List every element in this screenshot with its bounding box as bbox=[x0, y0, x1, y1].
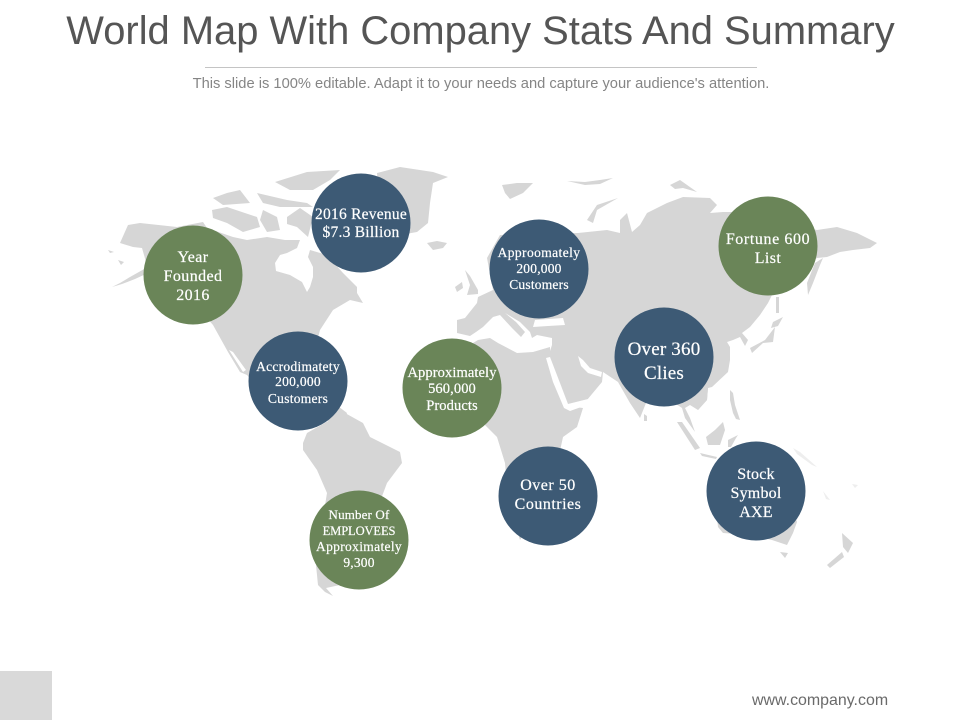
circle: countries: Countries bbox=[515, 496, 581, 513]
North America bbox=[120, 222, 363, 425]
circle: cities: Over 360 bbox=[628, 339, 700, 360]
world map bbox=[108, 167, 877, 596]
circle: customers europe: Approomately bbox=[498, 245, 580, 260]
circle: products: Products bbox=[426, 398, 478, 414]
circle: products: Approximately bbox=[407, 365, 497, 381]
Malaya and Indochina bbox=[698, 388, 708, 410]
circle: revenue: $7.3 Billion bbox=[322, 224, 400, 241]
subtitle: This slide is 100% editable. Adapt it to your needs and capture your audience's attention. bbox=[193, 76, 769, 92]
Novaya Zemlya bbox=[587, 198, 618, 223]
circle: fortune 600 bbox=[718, 196, 818, 296]
circle: stock symbol bbox=[706, 442, 806, 540]
circle: revenue: 2016 Revenue bbox=[315, 206, 407, 223]
Kamchatka bbox=[807, 258, 823, 295]
Iceland bbox=[427, 241, 447, 250]
Red Sea and Gulf of Aden bbox=[546, 357, 588, 411]
website url: www.company.com bbox=[752, 692, 888, 709]
Africa bbox=[445, 338, 583, 540]
Severnaya Zemlya bbox=[670, 180, 697, 192]
Japan bbox=[771, 317, 783, 328]
Greenland bbox=[377, 167, 448, 235]
circle: stock symbol: AXE bbox=[739, 504, 773, 521]
circle: employees: 9,300 bbox=[343, 555, 375, 570]
Europe and Asia bbox=[457, 197, 877, 432]
circle: customers europe bbox=[490, 220, 588, 318]
Java bbox=[700, 453, 717, 459]
circle: stock symbol: Stock bbox=[737, 466, 775, 483]
Tasmania bbox=[780, 552, 788, 558]
corner block bbox=[0, 671, 52, 720]
circle: products bbox=[402, 338, 502, 438]
circle: cities bbox=[614, 308, 714, 406]
circle: year founded bbox=[144, 226, 242, 324]
Sulawesi bbox=[728, 435, 738, 447]
New Zealand bbox=[827, 533, 853, 568]
Canadian Arctic islands bbox=[275, 170, 340, 190]
British Isles bbox=[465, 270, 478, 295]
Gulf of California bbox=[229, 350, 246, 372]
circle: customers americas: 200,000 bbox=[275, 374, 321, 389]
circle: employees: Number Of bbox=[329, 507, 390, 522]
Svalbard bbox=[502, 183, 533, 199]
circle: customers americas bbox=[248, 332, 348, 430]
circle: customers europe: Customers bbox=[509, 277, 569, 292]
Alaska peninsula bbox=[112, 268, 148, 287]
Borneo bbox=[706, 422, 725, 445]
circle: customers americas: Customers bbox=[268, 391, 328, 406]
circle: fortune 600: Fortune 600 bbox=[726, 231, 810, 248]
Sumatra bbox=[677, 422, 700, 450]
circle: stock symbol: Symbol bbox=[730, 485, 782, 502]
circle: countries bbox=[498, 446, 598, 546]
Franz Josef Land bbox=[567, 178, 613, 185]
Sri Lanka bbox=[644, 414, 647, 421]
circle: revenue bbox=[312, 174, 410, 272]
Persian Gulf bbox=[578, 356, 602, 377]
Black Sea bbox=[533, 318, 565, 327]
circle: customers americas: Accrodimatety bbox=[256, 359, 340, 374]
circle: year founded: Founded bbox=[164, 268, 222, 285]
circle: employees: EMPLOVEES bbox=[323, 524, 396, 538]
South America bbox=[303, 413, 402, 596]
circle: employees bbox=[310, 490, 408, 590]
circle: year founded: Year bbox=[177, 249, 209, 266]
faint Pacific islands bbox=[793, 448, 858, 500]
circle: cities: Clies bbox=[644, 363, 684, 384]
title: World Map With Company Stats And Summary bbox=[66, 9, 895, 53]
circle: products: 560,000 bbox=[428, 381, 476, 397]
circle: year founded: 2016 bbox=[176, 287, 210, 304]
Philippines bbox=[730, 390, 740, 420]
circle: customers europe: 200,000 bbox=[516, 261, 562, 276]
Sakhalin bbox=[776, 297, 779, 313]
circle: employees: Approximately bbox=[316, 539, 402, 554]
circle: fortune 600: List bbox=[755, 250, 781, 267]
circle: countries: Over 50 bbox=[520, 477, 576, 494]
Australia bbox=[715, 500, 797, 545]
